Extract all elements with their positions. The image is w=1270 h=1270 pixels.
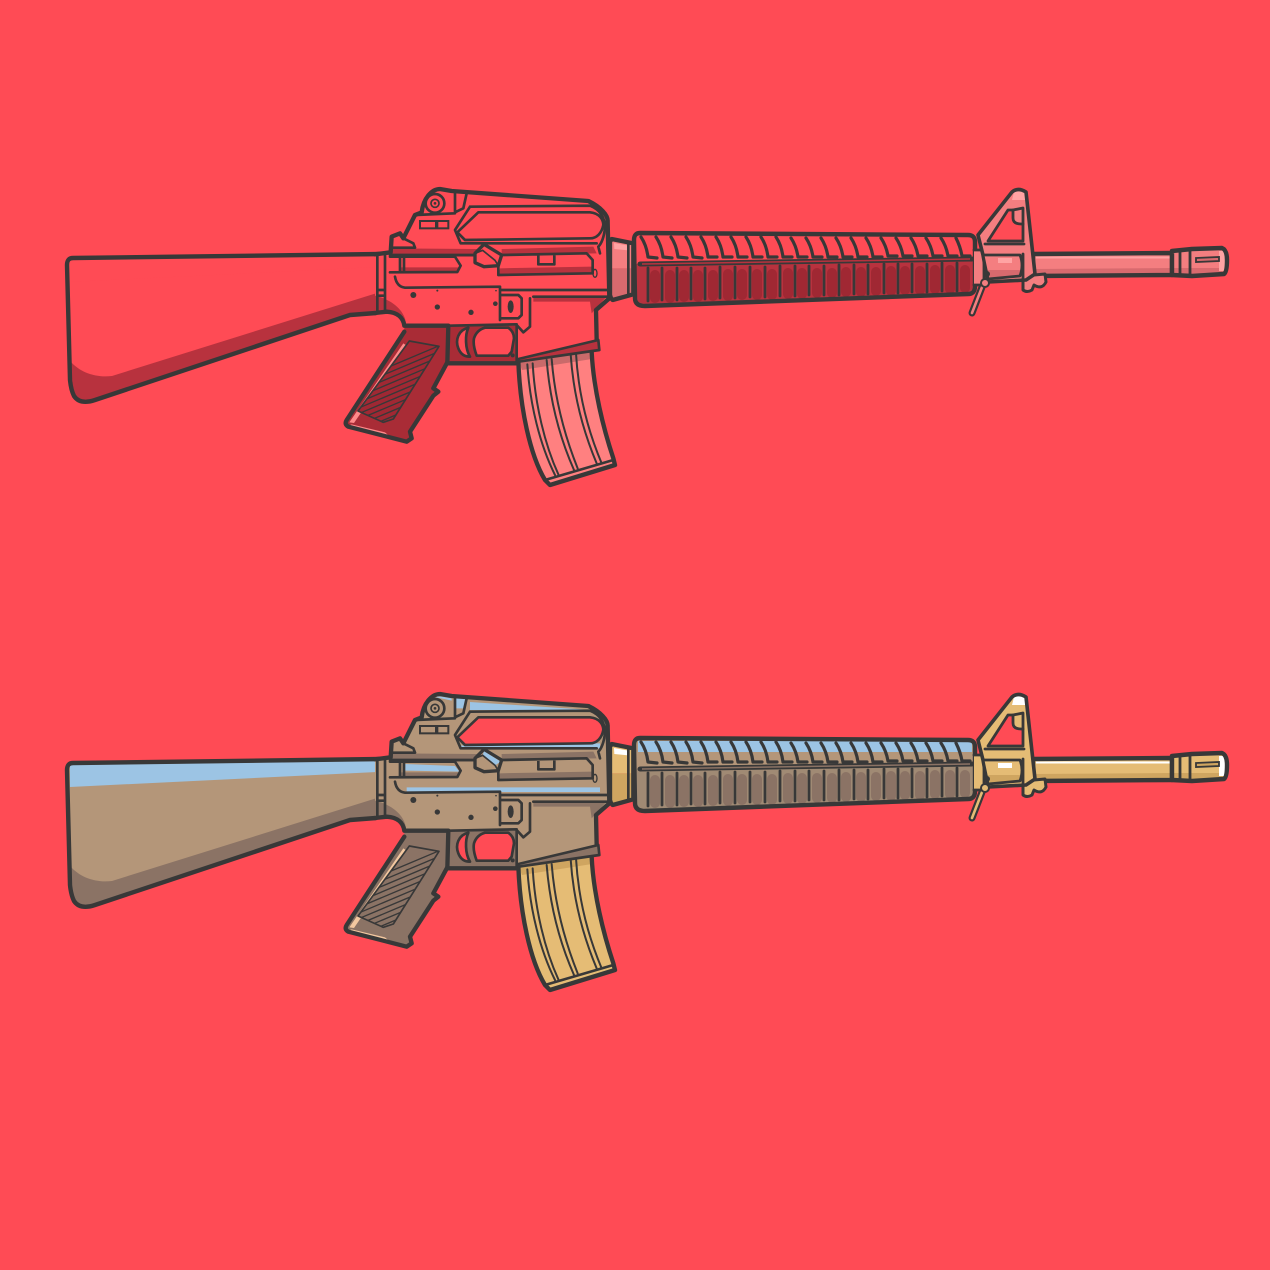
buttstock — [67, 254, 382, 402]
receiver assembly — [346, 189, 633, 485]
trigger guard opening — [474, 328, 514, 356]
front sight assembly — [972, 694, 1046, 818]
front sight assembly — [972, 190, 1046, 313]
upper and lower receiver body — [375, 189, 609, 363]
upper hooked ribs — [641, 237, 970, 258]
barrel and flash hider — [1033, 248, 1227, 276]
receiver assembly — [346, 694, 633, 990]
magazine — [518, 848, 615, 990]
lower rib lines — [648, 768, 957, 806]
body detail lines — [377, 192, 608, 363]
body detail lines — [377, 697, 608, 868]
carry handle window — [457, 212, 603, 240]
buttstock — [67, 759, 382, 907]
handguard — [634, 233, 975, 306]
delta ring — [610, 239, 633, 300]
illustration canvas — [64, 186, 1230, 992]
magazine band — [518, 340, 599, 362]
delta ring — [610, 744, 633, 805]
rifle: tan and blue full colour version — [67, 694, 1227, 990]
rifle: red monochrome version — [67, 189, 1227, 485]
carry handle window — [457, 717, 603, 745]
magazine band — [518, 845, 599, 867]
forward assist — [475, 749, 502, 772]
magazine — [518, 343, 615, 485]
barrel and flash hider — [1033, 753, 1227, 781]
forward assist — [475, 244, 502, 267]
upper hooked ribs — [641, 742, 970, 763]
handguard — [634, 738, 975, 811]
lower rib lines — [648, 263, 957, 301]
upper and lower receiver body — [375, 694, 609, 868]
pistol grip — [346, 326, 448, 446]
pistol grip — [346, 831, 448, 951]
trigger guard opening — [474, 833, 514, 861]
